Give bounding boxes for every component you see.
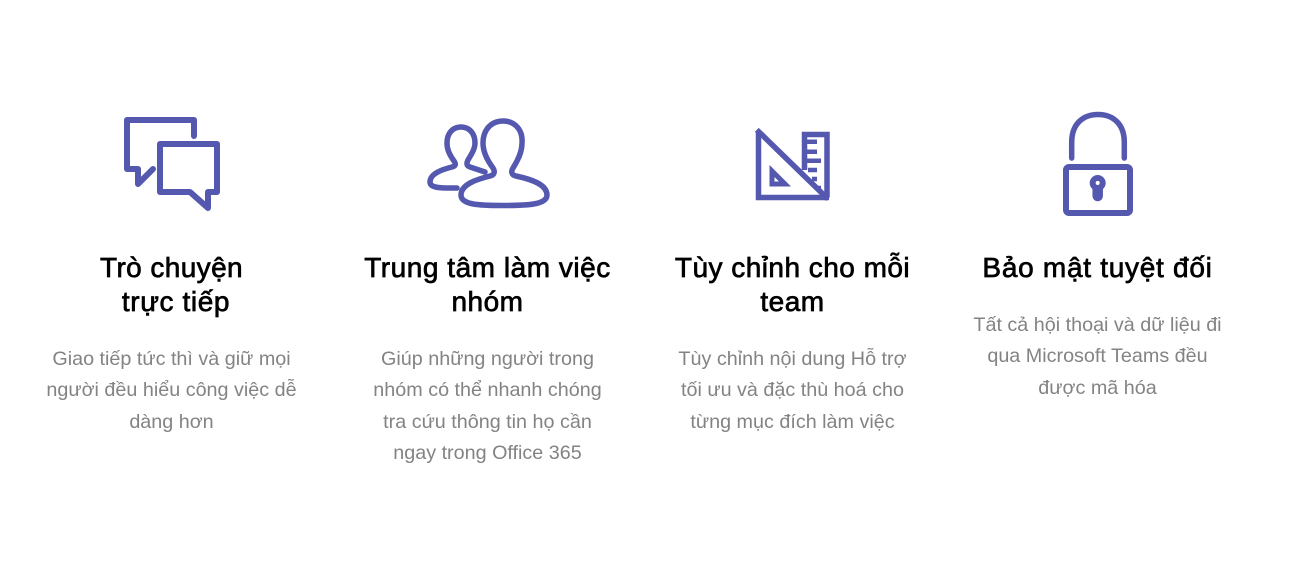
text: customize: từng mục đích làm việc xyxy=(690,411,895,433)
column: customize xyxy=(675,252,910,433)
text: security: qua Microsoft Teams đều xyxy=(987,345,1208,367)
heading: teamwork xyxy=(364,252,611,317)
column: security xyxy=(973,252,1222,399)
heading: customize: team xyxy=(760,286,825,317)
heading: security: Bảo mật tuyệt đối xyxy=(982,252,1213,283)
text: teamwork xyxy=(373,348,602,464)
text: teamwork: Giúp những người trong xyxy=(381,348,594,370)
text: chat: Giao tiếp tức thì và giữ mọi xyxy=(52,348,291,370)
icon: chat bubbles xyxy=(127,120,217,208)
icon: people xyxy=(430,121,547,206)
heading: teamwork: nhóm xyxy=(451,286,524,317)
text: security: Tất cả hội thoại và dữ liệu đi xyxy=(973,314,1222,336)
text: customize: tối ưu và đặc thù hoá cho xyxy=(681,379,904,401)
heading: customize: Tùy chỉnh cho mỗi xyxy=(675,252,910,283)
heading: teamwork: Trung tâm làm việc xyxy=(364,252,611,283)
heading: chat: trực tiếp xyxy=(122,286,230,317)
text: chat: dàng hơn xyxy=(129,411,214,433)
icon: padlock xyxy=(1066,114,1130,213)
heading: chat: Trò chuyện xyxy=(100,252,243,283)
text: teamwork: ngay trong Office 365 xyxy=(393,442,582,464)
text: security: được mã hóa xyxy=(1038,377,1157,399)
icon: ruler and set square xyxy=(757,130,829,199)
text: customize: Tùy chỉnh nội dung Hỗ trợ xyxy=(678,348,907,370)
column: teamwork xyxy=(364,252,611,464)
text: chat: người đều hiểu công việc dễ xyxy=(46,379,297,401)
text: teamwork: nhóm có thể nhanh chóng xyxy=(373,379,602,401)
text: customize xyxy=(678,348,907,433)
text: security xyxy=(973,314,1222,399)
column: chat xyxy=(46,252,297,433)
heading: chat xyxy=(100,252,243,318)
text: teamwork: tra cứu thông tin họ cần xyxy=(383,411,592,433)
text: chat xyxy=(46,348,297,433)
heading: customize xyxy=(675,252,910,317)
